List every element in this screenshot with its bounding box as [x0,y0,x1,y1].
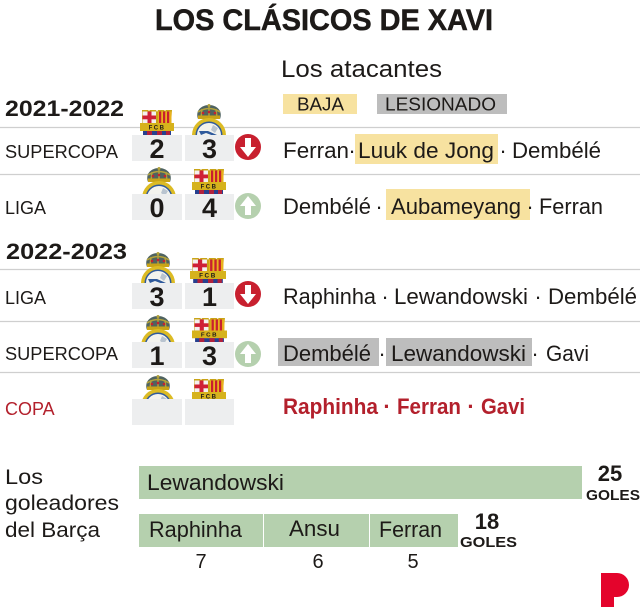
match row: Supercopa 2021-22: Ferran [283,138,349,163]
match row: Liga 2021-22 [5,167,603,223]
scorers heading: Los [5,466,43,489]
icon: publisher logo [601,573,629,607]
match row: Copa 2022-23 [5,375,525,425]
season heading 2022-2023: 2022-2023 [6,239,127,264]
match row: Liga 2022-23: 1 [202,282,217,312]
match row: Liga 2022-23 [5,252,637,312]
bar: Lewandowski 25 goals: GOLES [586,487,640,504]
match row: Liga 2021-22: Dembélé [283,194,371,219]
bars: other scorers 18 goals: 7 [195,551,207,573]
match row: Copa 2022-23: · [383,394,391,419]
attackers heading: Los atacantes [281,56,442,83]
match row: Supercopa 2022-23: 1 [149,341,165,371]
legend: baja: BAJA [297,94,344,114]
legend: baja [283,94,357,114]
match row: Supercopa 2022-23: Gavi [546,341,589,366]
match row: Supercopa 2022-23 [5,315,589,371]
match row: Liga 2021-22: Ferran [539,194,603,219]
match row: Supercopa 2022-23: Lewandowski [391,341,526,366]
match row: Supercopa 2021-22: SUPERCOPA [5,142,118,162]
title: LOS CLÁSICOS DE XAVI [155,3,493,37]
match row: Liga 2021-22: 4 [202,193,217,223]
bars: other scorers 18 goals: Raphinha [149,517,243,542]
bars: other scorers 18 goals [139,509,517,573]
bars: other scorers 18 goals: 5 [407,551,419,573]
bar: Lewandowski 25 goals [139,461,640,504]
row separators [0,128,640,372]
match row: Supercopa 2022-23: · [531,341,539,366]
match row: Liga 2022-23: · [534,284,542,309]
match row: Liga 2022-23: Lewandowski [394,284,528,309]
match row: Liga 2021-22: · [375,194,383,219]
match row: Supercopa 2022-23: · [378,341,386,366]
match row: Liga 2022-23: 3 [149,282,165,312]
scorers heading: del Barça [5,519,100,542]
scorers heading [5,466,119,542]
match row: Liga 2021-22: 0 [149,193,165,223]
match row: Copa 2022-23: COPA [5,399,55,419]
match row: Copa 2022-23: Ferran [397,394,461,419]
bars: other scorers 18 goals: GOLES [460,534,517,551]
match row: Liga 2022-23: Dembélé [548,284,637,309]
season heading 2021-2022: 2021-2022 [5,96,124,121]
legend: lesionado: LESIONADO [385,94,496,114]
bar: Lewandowski 25 goals: 25 [598,461,622,486]
match row: Copa 2022-23: Gavi [481,394,525,419]
match row: Supercopa 2022-23: SUPERCOPA [5,344,118,364]
match row: Liga 2021-22: LIGA [5,198,46,218]
bars: other scorers 18 goals: 6 [312,551,324,573]
match row: Supercopa 2022-23: Dembélé [283,341,371,366]
match row: Liga 2021-22: Aubameyang [391,194,521,219]
match row: Liga 2022-23: · [381,284,389,309]
match row: Supercopa 2021-22: · [499,138,507,163]
match row: Supercopa 2021-22: 3 [202,134,217,164]
match row: Supercopa 2021-22: 2 [149,134,165,164]
bars: other scorers 18 goals: 18 [475,509,499,534]
bars: other scorers 18 goals: Ansu [289,516,340,541]
match row: Supercopa 2021-22: Dembélé [512,138,601,163]
match row: Supercopa 2021-22 [5,104,601,164]
match row: Supercopa 2022-23: 3 [202,341,217,371]
bar: Lewandowski 25 goals: Lewandowski [147,470,284,495]
match row: Copa 2022-23: Raphinha [283,394,379,419]
match row: Liga 2021-22: · [526,194,534,219]
bars: other scorers 18 goals: Ferran [379,517,442,542]
scorers heading: goleadores [5,492,119,515]
match row: Liga 2022-23: Raphinha [283,284,377,309]
match row: Liga 2022-23: LIGA [5,288,46,308]
match row: Supercopa 2021-22: · [348,138,356,163]
match row: Supercopa 2021-22: Luuk de Jong [358,138,494,163]
match row: Copa 2022-23: · [467,394,475,419]
